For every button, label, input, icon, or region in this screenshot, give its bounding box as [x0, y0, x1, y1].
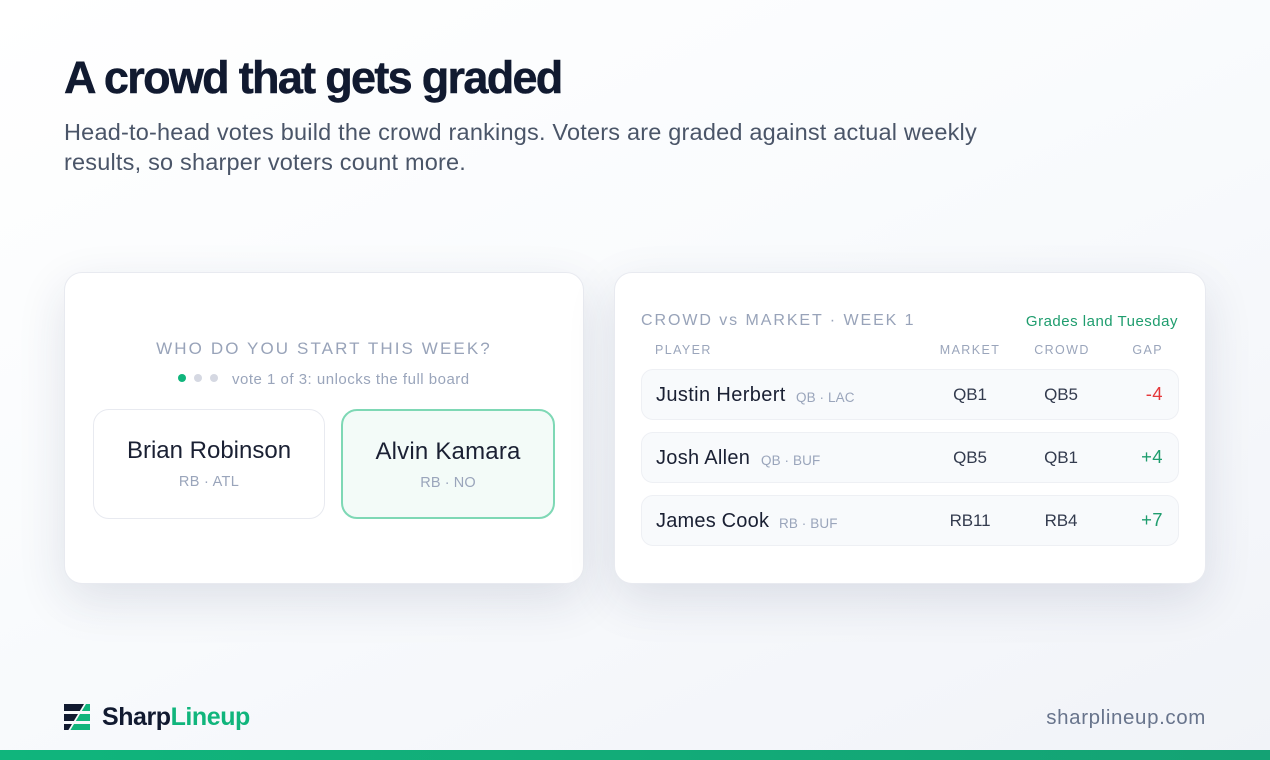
row: Josh Allen: QB1: [1044, 448, 1078, 467]
vote progress text: vote 1 of 3: unlocks the full board: [232, 371, 470, 388]
row: Josh Allen: Josh Allen: [656, 447, 750, 469]
panel: vote card: [64, 272, 584, 584]
row: Josh Allen: QB · BUF: [761, 453, 820, 468]
title: A crowd that gets graded: [64, 52, 562, 103]
option name: Alvin Kamara: Alvin Kamara: [375, 438, 521, 465]
row: Justin Herbert: QB5: [1044, 385, 1078, 404]
icon: logo mark: [64, 704, 90, 730]
panel: crowd vs market: [614, 272, 1206, 584]
bottom accent bar: [0, 750, 1270, 760]
row: James Cook: James Cook: [656, 510, 769, 532]
row: Josh Allen: QB5: [953, 448, 987, 467]
row: Justin Herbert: QB1: [953, 385, 987, 404]
option team: Alvin Kamara: RB · NO: [420, 475, 476, 491]
row: James Cook: [641, 495, 1179, 546]
subtitle: [64, 119, 977, 175]
row: Justin Herbert: -4: [1146, 383, 1163, 404]
row: James Cook: RB11: [950, 511, 990, 530]
column headers: CROWD: [1034, 343, 1090, 357]
row: James Cook: RB4: [1045, 511, 1077, 530]
option team: Brian Robinson: RB · ATL: [179, 474, 239, 490]
column headers: GAP: [1132, 343, 1163, 357]
vote heading: WHO DO YOU START THIS WEEK?: [156, 339, 492, 358]
option: Brian Robinson: [93, 409, 325, 519]
subtitle: results, so sharper voters count more.: [64, 149, 466, 175]
grades note: Grades land Tuesday: [1026, 313, 1178, 330]
column headers: MARKET: [940, 343, 1000, 357]
option name: Brian Robinson: Brian Robinson: [127, 437, 291, 464]
website url: sharplineup.com: [1046, 706, 1206, 729]
row: Justin Herbert: [641, 369, 1179, 420]
row: Josh Allen: [641, 432, 1179, 483]
table heading: CROWD vs MARKET · WEEK 1: [641, 312, 915, 329]
progress dots: [178, 374, 218, 382]
column headers: [655, 343, 1163, 357]
row: Josh Allen: +4: [1141, 446, 1163, 467]
logo wordmark: SharpLineup: [102, 703, 250, 731]
option: Alvin Kamara selected: [341, 409, 555, 519]
column headers: PLAYER: [655, 343, 712, 357]
subtitle: Head-to-head votes build the crowd rankings. Voters are graded against actual weekly: [64, 119, 977, 145]
row: James Cook: RB · BUF: [779, 516, 838, 531]
row: Justin Herbert: QB · LAC: [796, 390, 855, 405]
row: Justin Herbert: Justin Herbert: [656, 384, 786, 406]
row: James Cook: +7: [1141, 509, 1163, 530]
